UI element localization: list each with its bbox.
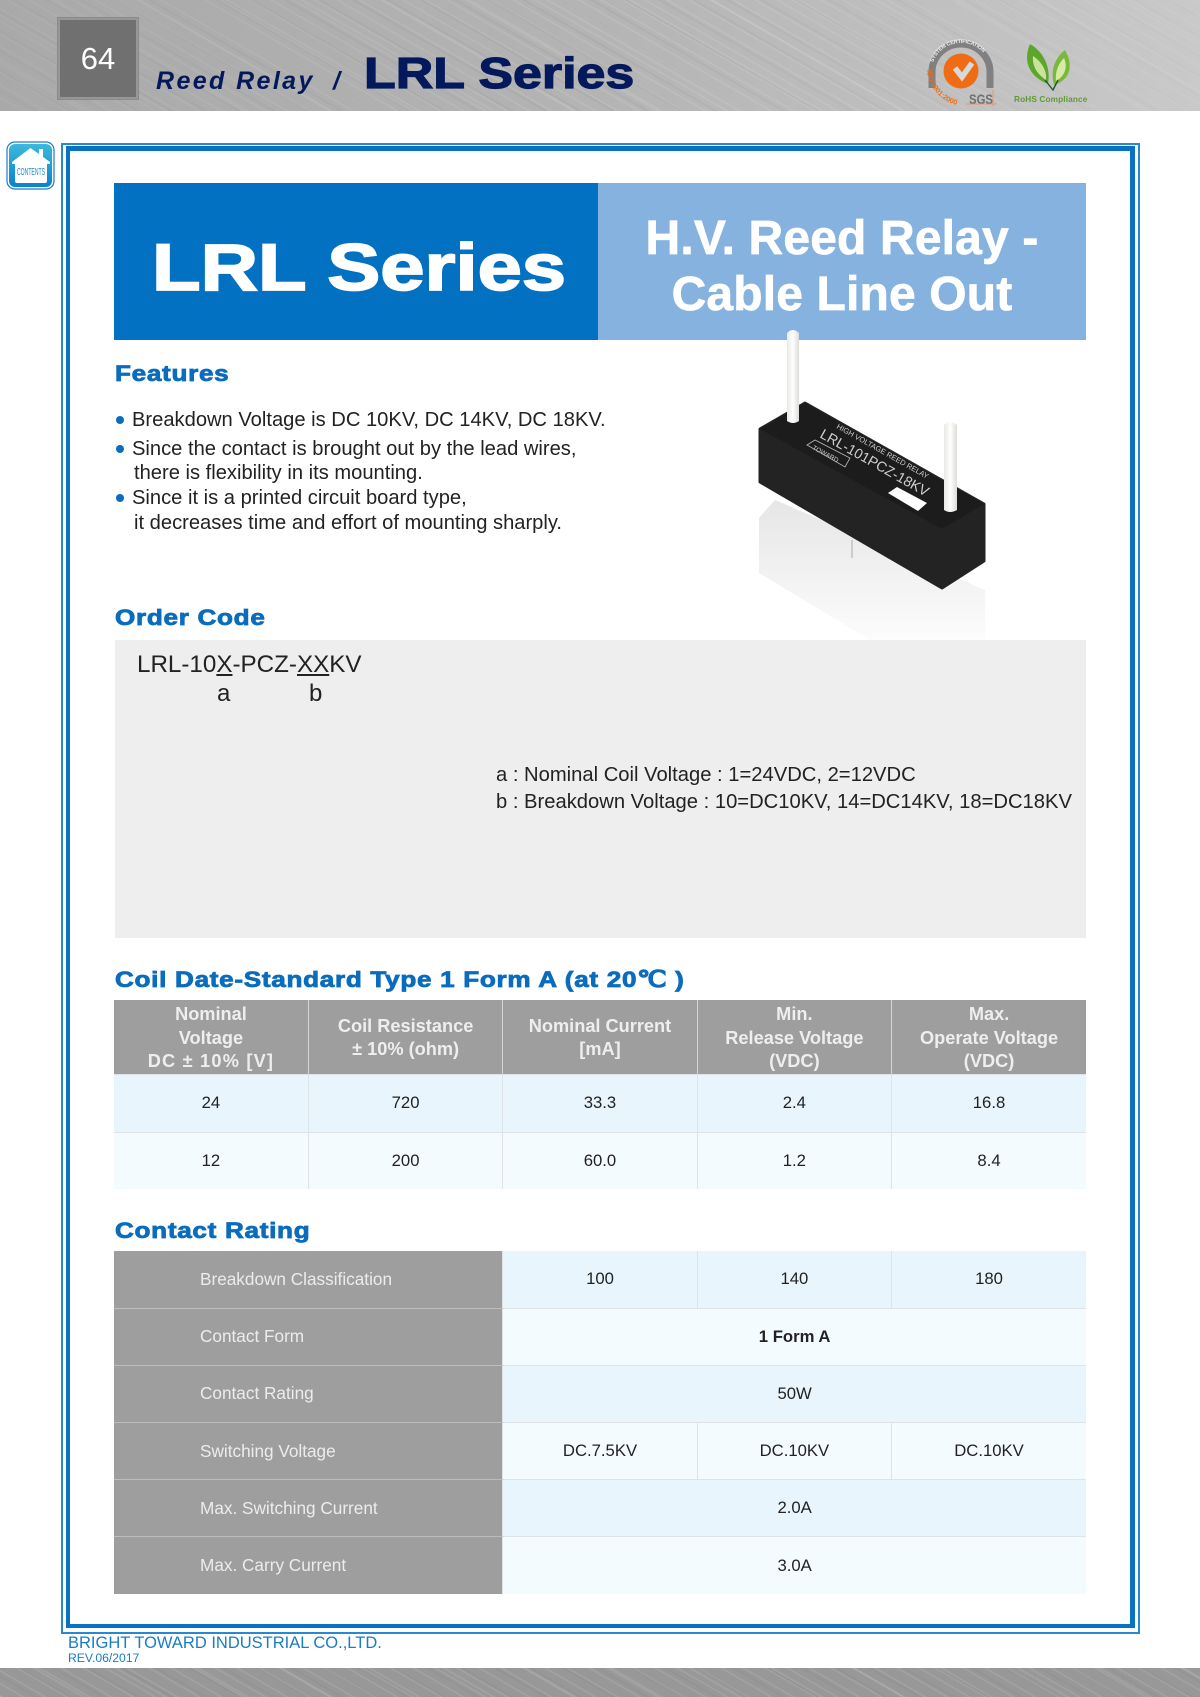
table: coil data: Min. — [776, 1004, 813, 1024]
bullet 3: it decreases time and effort of mounting sharply. — [134, 512, 562, 534]
page frame — [61, 143, 1140, 1634]
legend b: b : Breakdown Voltage : 10=DC10KV, 14=DC14KV, 18=DC18KV — [496, 791, 1072, 813]
table: coil data: 2.4 — [783, 1093, 806, 1112]
relay lead — [851, 540, 853, 558]
table: contact rating: Switching Voltage — [200, 1441, 336, 1461]
table: contact rating: DC.10KV — [760, 1441, 829, 1460]
icon: ISO SGS certification seal: SGS — [969, 92, 993, 107]
heading: contact rating: Contact Rating — [115, 1218, 310, 1243]
relay body — [760, 403, 984, 588]
table: contact rating: Breakdown Classification — [200, 1269, 392, 1289]
table: coil data: Nominal — [175, 1004, 247, 1024]
table: coil data: 1.2 — [783, 1151, 806, 1170]
footer revision: REV.06/2017 — [68, 1651, 139, 1665]
table: coil data: 200 — [392, 1151, 420, 1170]
table: coil data: 33.3 — [584, 1093, 616, 1112]
wire lead right — [944, 422, 957, 512]
relay top markings: TOWARD — [811, 445, 840, 464]
icon: ISO SGS certification seal: SYSTEM CERTIFICATION — [930, 39, 986, 62]
heading: coil data: Coil Date-Standard Type 1 Form A (at 20℃ ) — [115, 967, 685, 992]
legend a: a : Nominal Coil Voltage : 1=24VDC, 2=12VDC — [496, 764, 916, 786]
header band — [0, 0, 1200, 111]
table: coil data: 24 — [202, 1093, 220, 1112]
table: coil data: 60.0 — [584, 1151, 616, 1170]
heading: features: Features — [115, 361, 229, 386]
RoHS Compliance caption: RoHS Compliance — [1014, 94, 1087, 104]
footer company name: BRIGHT TOWARD INDUSTRIAL CO.,LTD. — [68, 1634, 382, 1652]
page number box — [58, 18, 138, 99]
table: contact rating: Contact Rating — [200, 1383, 314, 1403]
page number box: 64 — [81, 41, 115, 76]
order code formula: LRL-10X-PCZ-XXKV — [137, 651, 362, 678]
table: contact rating: Contact Form — [200, 1326, 304, 1346]
table: coil data: Operate Voltage — [920, 1028, 1058, 1048]
table: coil data: (VDC) — [964, 1051, 1014, 1071]
icon: ISO SGS certification seal — [927, 39, 997, 107]
banner: product description: H.V. Reed Relay - — [646, 212, 1038, 265]
table: coil data: ± 10% (ohm) — [352, 1039, 459, 1059]
table: contact rating: 2.0A — [777, 1498, 812, 1517]
product image: reed relay — [758, 330, 986, 608]
table: contact rating — [114, 1251, 1086, 1594]
table: coil data: DC ± 10% [V] — [148, 1051, 274, 1071]
bullet 2: there is flexibility in its mounting. — [134, 462, 423, 484]
icon: ISO SGS certification seal: ISO 9001:2000 — [927, 70, 958, 104]
table: coil data: 8.4 — [977, 1151, 1001, 1170]
table: contact rating: 180 — [975, 1269, 1003, 1288]
order code panel — [115, 640, 1086, 938]
table: coil data: (VDC) — [769, 1051, 820, 1071]
banner: series name — [114, 183, 598, 340]
icon: contents home button — [6, 141, 55, 190]
table: coil data: [mA] — [579, 1039, 621, 1059]
table: contact rating: Max. Carry Current — [200, 1555, 346, 1575]
relay top markings: LRL-101PCZ-18KV — [817, 427, 932, 501]
code part b: b — [309, 680, 322, 707]
header title: LRL Series: LRL Series — [364, 49, 634, 98]
table: contact rating: 50W — [777, 1384, 812, 1403]
banner: product description — [598, 183, 1086, 340]
table: coil data: Voltage — [179, 1028, 243, 1048]
table: coil data: 12 — [202, 1151, 220, 1170]
bullet 3: Since it is a printed circuit board type, — [132, 487, 467, 509]
bullet 3 — [116, 487, 562, 534]
bullet 2: Since the contact is brought out by the lead wires, — [132, 438, 576, 460]
relay reflection — [759, 500, 985, 640]
table: coil data: Nominal Current — [529, 1016, 671, 1036]
table: contact rating: 1 Form A — [759, 1327, 830, 1346]
icon: RoHS leaves — [1027, 44, 1070, 92]
table: coil data: Release Voltage — [725, 1028, 863, 1048]
table: contact rating: 100 — [586, 1269, 614, 1288]
table: coil data: Max. — [969, 1004, 1009, 1024]
banner: series name: LRL Series — [152, 230, 566, 304]
banner: product description: Cable Line Out — [672, 268, 1012, 321]
header slash: / — [333, 67, 340, 95]
table: coil data: 720 — [392, 1093, 420, 1112]
table: contact rating: DC.7.5KV — [563, 1441, 637, 1460]
table: coil data — [114, 1000, 1086, 1189]
code part a: a — [217, 680, 230, 707]
table: coil data: 16.8 — [973, 1093, 1005, 1112]
table: contact rating: 140 — [780, 1269, 808, 1288]
bullet 1: Breakdown Voltage is DC 10KV, DC 14KV, DC 18KV. — [132, 409, 606, 431]
table: coil data: Coil Resistance — [338, 1016, 473, 1036]
heading: order code: Order Code — [115, 605, 266, 630]
table: contact rating: DC.10KV — [954, 1441, 1024, 1460]
relay top markings: HIGH VOLTAGE REED RELAY — [835, 422, 930, 481]
table: contact rating: 3.0A — [777, 1556, 812, 1575]
header title: Reed Relay: Reed Relay — [156, 67, 315, 95]
feature list — [116, 409, 606, 534]
footer band — [0, 1668, 1200, 1697]
wire lead left — [787, 330, 799, 423]
bullet 2 — [116, 438, 576, 484]
table: contact rating: Max. Switching Current — [200, 1498, 378, 1518]
relay body top — [760, 403, 984, 529]
